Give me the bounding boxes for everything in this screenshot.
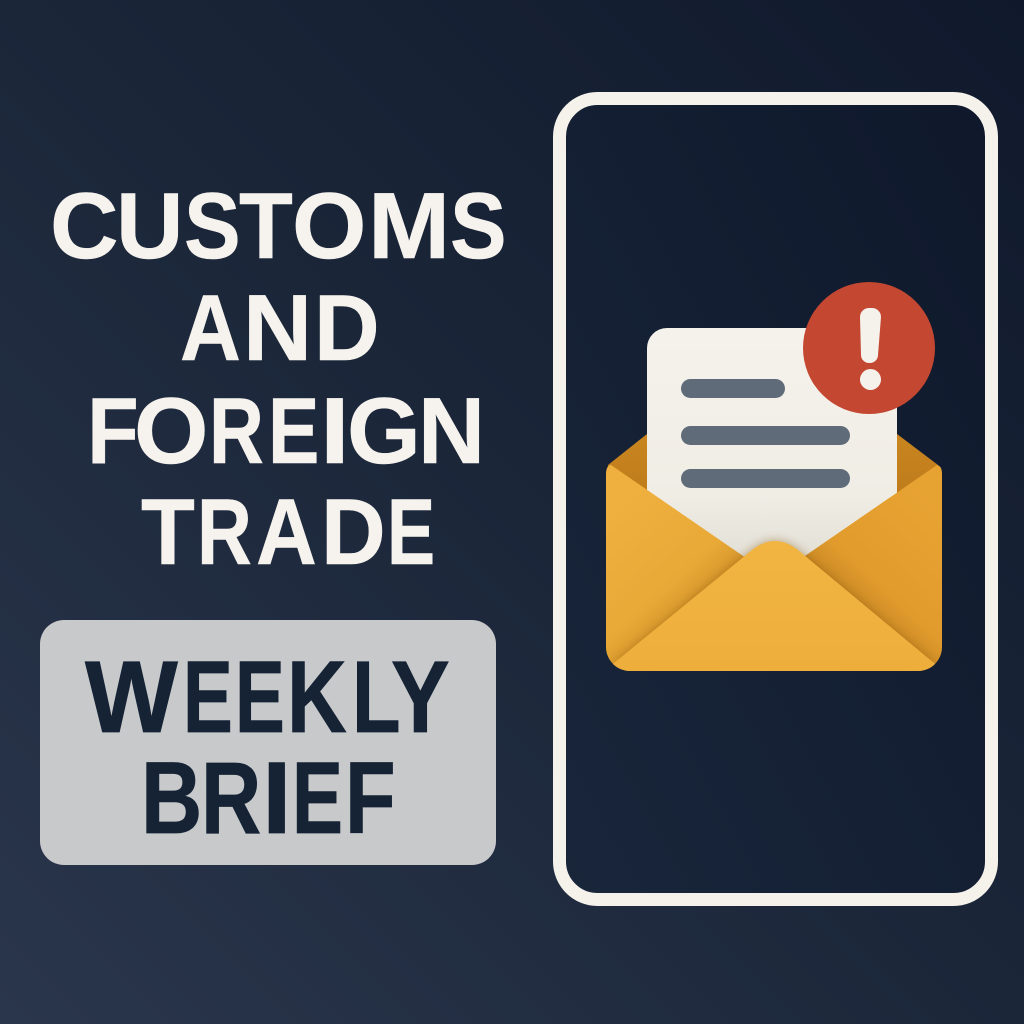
title: customs and foreign trade: T xyxy=(141,479,195,584)
panel: weekly brief badge: I xyxy=(262,741,292,855)
panel: weekly brief badge: E xyxy=(183,640,233,754)
text line 1 xyxy=(681,379,785,398)
panel: weekly brief badge: E xyxy=(292,741,343,855)
panel: weekly brief badge: B xyxy=(141,741,203,855)
phone outline xyxy=(560,98,992,900)
paper letter xyxy=(647,328,897,600)
title: customs and foreign trade: G xyxy=(347,378,421,483)
panel: weekly brief badge: R xyxy=(201,741,262,855)
text line 3 xyxy=(681,469,850,488)
title: customs and foreign trade: R xyxy=(197,479,252,584)
panel: weekly brief badge: K xyxy=(287,640,347,754)
title: customs and foreign trade: T xyxy=(239,173,293,278)
title: customs and foreign trade: I xyxy=(320,378,350,483)
title: customs and foreign trade: C xyxy=(50,173,119,278)
alert badge xyxy=(803,282,935,414)
panel: weekly brief badge: E xyxy=(235,640,285,754)
title: customs and foreign trade: M xyxy=(368,173,450,278)
title: customs and foreign trade: O xyxy=(134,378,208,483)
title: customs and foreign trade: A xyxy=(180,275,240,380)
title: customs and foreign trade: R xyxy=(209,378,264,483)
left panel xyxy=(606,465,744,671)
envelope back flap xyxy=(606,434,942,600)
title: customs and foreign trade: N xyxy=(243,275,312,380)
title: customs and foreign trade: E xyxy=(386,479,435,584)
panel: weekly brief badge: W xyxy=(85,640,177,754)
title: customs and foreign trade: U xyxy=(116,173,184,278)
panel: weekly brief badge: L xyxy=(352,640,400,754)
title: customs and foreign trade: E xyxy=(268,378,319,483)
flap shadow xyxy=(612,541,936,666)
text line 2 xyxy=(681,426,850,445)
title: customs and foreign trade: D xyxy=(314,275,380,380)
title: customs and foreign trade: N xyxy=(418,378,485,483)
title: customs and foreign trade: F xyxy=(87,378,138,483)
panel: weekly brief badge xyxy=(40,620,496,865)
exclamation mark xyxy=(860,308,881,390)
title: customs and foreign trade: S xyxy=(184,173,241,278)
front flap xyxy=(608,541,942,671)
title: customs and foreign trade xyxy=(50,173,506,584)
title: customs and foreign trade: D xyxy=(321,479,385,584)
title: customs and foreign trade: O xyxy=(292,173,367,278)
title: customs and foreign trade: S xyxy=(450,173,506,278)
panel: weekly brief badge: Y xyxy=(391,640,449,754)
title: customs and foreign trade: A xyxy=(256,479,317,584)
right panel xyxy=(805,465,942,671)
panel: weekly brief badge: F xyxy=(345,741,396,855)
icon: open envelope with alert xyxy=(606,282,942,680)
envelope front xyxy=(606,465,942,680)
